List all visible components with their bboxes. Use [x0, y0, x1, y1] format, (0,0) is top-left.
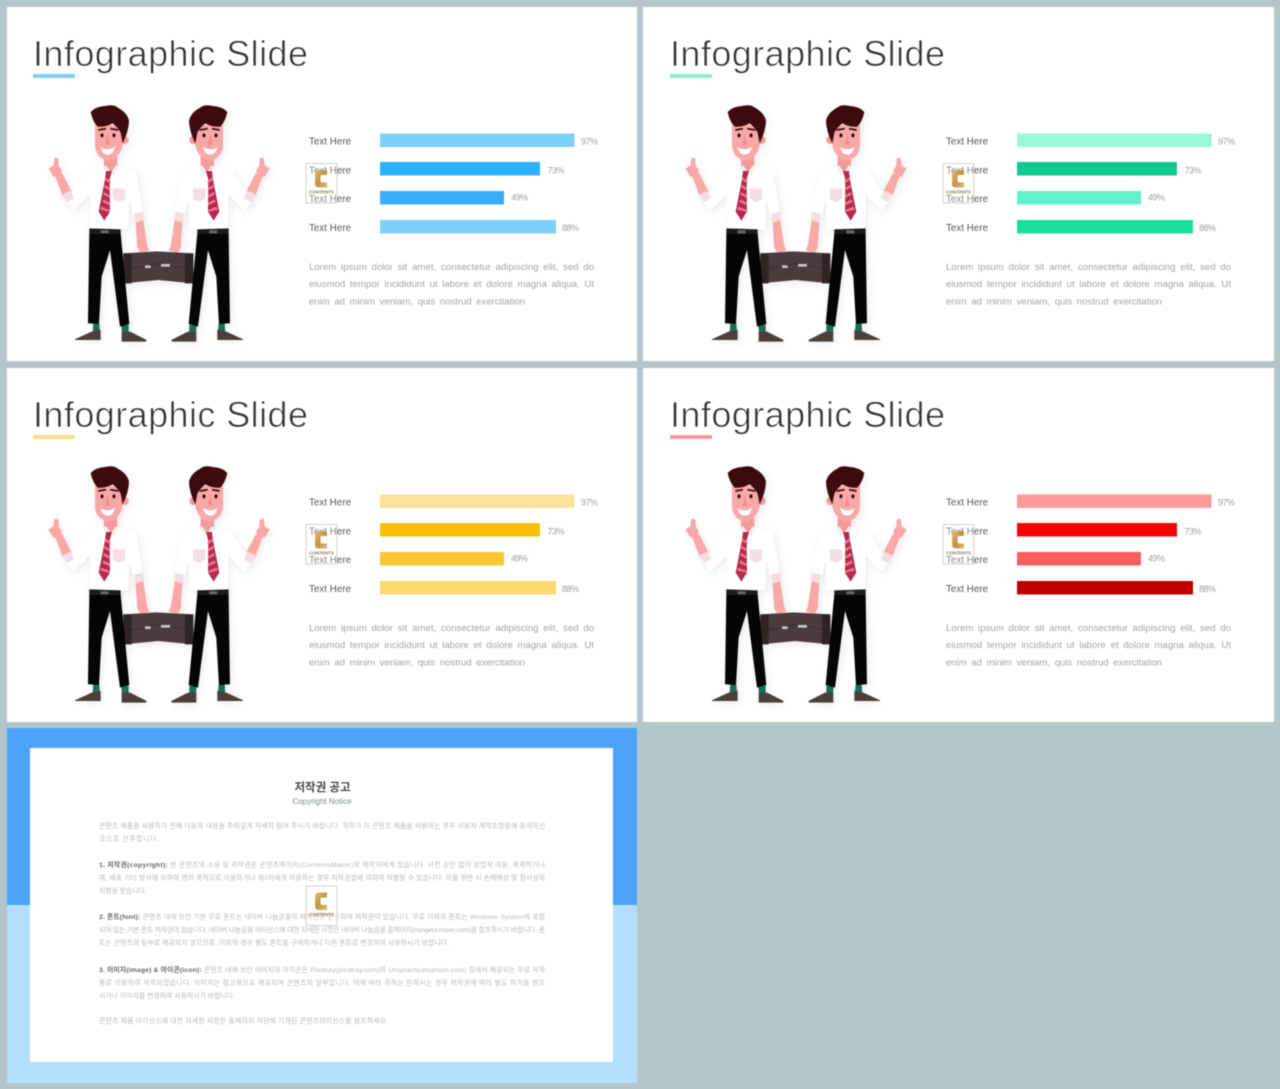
bar chart: Text Here — [309, 136, 351, 148]
bar chart: Text Here — [309, 498, 351, 508]
panel: blue infographic slide — [7, 7, 637, 361]
watermark logo: CONTENTS — [946, 550, 971, 556]
title: Infographic Slide — [33, 394, 308, 435]
bar chart: 97% — [1218, 497, 1235, 507]
panel: green infographic slide — [643, 7, 1274, 361]
bar chart — [309, 134, 598, 234]
title underline — [33, 74, 75, 78]
bar chart: 49% — [1148, 193, 1165, 203]
bar chart — [946, 134, 1235, 234]
title underline — [670, 435, 712, 439]
title: Infographic Slide — [670, 394, 945, 435]
bar chart: 88% — [1199, 223, 1216, 233]
body text — [309, 623, 594, 668]
title underline — [670, 74, 712, 78]
notice body text: 것으로 간주합니다. — [99, 834, 159, 843]
watermark logo: CONTENTS — [309, 190, 334, 194]
notice body text: 재, 배포 기타 방식에 의하여 영리 목적으로 이용하거나 제3자에게 이용하는 경우 저작권법에 의하여 처벌될 수 있습니다. 이를 위반 시 손해배상 및 형사상의 — [99, 873, 545, 882]
body text: Lorem ipsum dolor sit amet, consectetur adipiscing elit, sed do — [309, 623, 594, 634]
watermark logo — [306, 524, 337, 564]
notice heading: 저작권 공고 — [294, 780, 351, 794]
bar chart: Text Here — [309, 223, 351, 234]
body text: Lorem ipsum dolor sit amet, consectetur adipiscing elit, sed do — [946, 623, 1231, 634]
body text: Lorem ipsum dolor sit amet, consectetur adipiscing elit, sed do — [309, 262, 594, 273]
title: Infographic Slide — [670, 33, 945, 74]
title underline — [33, 435, 75, 439]
bar chart: 49% — [511, 193, 528, 203]
body text — [309, 262, 594, 308]
illustration: two businessmen carrying a briefcase — [48, 466, 270, 703]
bar chart: 73% — [1184, 526, 1202, 536]
bar chart: Text Here — [946, 194, 988, 205]
bar chart: Text Here — [946, 166, 988, 176]
bar chart: Text Here — [309, 555, 351, 566]
body text: eiusmod tempor incididunt ut labore et dolore magna aliqua. Ut — [946, 640, 1231, 651]
notice body text: 처벌을 받습니다. — [99, 886, 147, 895]
body text: enim ad minim veniam, quis nostrud exercitation — [946, 658, 1162, 668]
body text: eiusmod tempor incididunt ut labore et dolore magna aliqua. Ut — [309, 640, 594, 651]
body text — [946, 623, 1231, 668]
notice body text: 콘텐츠 제품 라이선스에 대한 자세한 사항은 홈페이지 하단에 기재된 콘텐츠라이선스를 참조하세요 — [99, 1016, 386, 1025]
watermark logo: CONTENTS — [309, 912, 334, 917]
watermark logo — [943, 524, 974, 564]
illustration: two businessmen carrying a briefcase — [685, 105, 907, 342]
bar chart: Text Here — [946, 223, 988, 234]
title: Infographic Slide — [33, 33, 308, 74]
notice body text: 물로 이용하여 저작되었습니다. 이미지는 참고용으로 제공되며 콘텐츠의 일부입니다. 이에 따라 귀하는 원하시는 경우 저작권에 따라 별도 허가를 받으 — [99, 978, 545, 987]
body text: Lorem ipsum dolor sit amet, consectetur adipiscing elit, sed do — [946, 262, 1231, 273]
bar chart: Text Here — [946, 136, 988, 148]
notice body text: 3. 이미지(image) & 아이콘(icon): 콘텐츠 내에 쓰인 이미지와 아이콘은 Pixabay(pixabay.com)와 Unsplash(unsplash.com) 등에서 제공되는 무료 저작 — [99, 965, 545, 974]
illustration: two businessmen carrying a briefcase — [685, 466, 907, 703]
bar chart: Text Here — [946, 584, 988, 595]
body text: enim ad minim veniam, quis nostrud exercitation — [946, 296, 1162, 308]
bar chart: Text Here — [946, 498, 988, 508]
body text: eiusmod tempor incididunt ut labore et dolore magna aliqua. Ut — [946, 279, 1231, 290]
bar chart — [946, 494, 1235, 595]
watermark logo: CONTENTS — [309, 550, 334, 556]
panel: yellow infographic slide — [7, 368, 637, 722]
notice body text — [99, 821, 546, 1025]
watermark logo — [943, 164, 974, 203]
bar chart: 73% — [548, 526, 564, 536]
bar chart: Text Here — [946, 526, 988, 538]
bar chart — [309, 494, 598, 595]
watermark logo — [306, 886, 337, 926]
bar chart: Text Here — [309, 584, 351, 595]
bar chart: 97% — [1218, 136, 1235, 146]
body text: eiusmod tempor incididunt ut labore et dolore magna aliqua. Ut — [309, 279, 594, 290]
notice body text: 트는 콘텐츠의 일부로 제공되지 않으므로, 이외의 경우 별도 폰트를 구매하거나 다른 폰트로 변경하여 사용하시기 바랍니다. — [99, 938, 449, 947]
bar chart: 88% — [1199, 584, 1216, 594]
notice body text: 시거나 이미지를 변경하여 사용하시기 바랍니다. — [99, 991, 235, 1000]
bar chart: Text Here — [309, 194, 351, 205]
illustration: two businessmen carrying a briefcase — [48, 105, 270, 342]
notice subheading: Copyright Notice — [292, 797, 352, 806]
bar chart: 73% — [1184, 165, 1202, 175]
bar chart: 88% — [562, 223, 579, 233]
bar chart: 49% — [511, 554, 528, 564]
bar chart: 97% — [581, 497, 598, 507]
notice body text: 1. 저작권(copyright): 본 콘텐츠의 소유 및 저작권은 콘텐츠메이커(ContentsMaker)와 제작자에게 있습니다. 사전 승인 없이 상업적 이용, 복제하거나 — [99, 860, 546, 869]
notice body text: 콘텐츠 제품을 사용하기 전에 다음의 내용을 주의깊게 자세히 읽어 주시기 바랍니다. 귀하가 이 콘텐츠 제품을 사용하는 경우 사용자 계약조항들에 동의하신 — [99, 821, 545, 830]
bar chart: Text Here — [309, 166, 351, 176]
body text: enim ad minim veniam, quis nostrud exercitation — [309, 658, 525, 668]
bar chart: 73% — [548, 165, 564, 175]
bar chart: 97% — [581, 136, 598, 146]
panel: copyright notice slide — [7, 728, 637, 1083]
bar chart: 88% — [562, 584, 579, 594]
bar chart: 49% — [1148, 554, 1165, 564]
watermark logo: CONTENTS — [946, 190, 971, 194]
panel: red infographic slide — [643, 368, 1274, 722]
notice body text: 2. 폰트(font): 콘텐츠 내에 쓰인 기본 무료 폰트는 네이버 나눔글꼴의 저작권을 준수하며 저작권이 있습니다. 무료 이외의 폰트는 Windows System에 포함 — [99, 912, 545, 921]
bar chart: Text Here — [309, 526, 351, 538]
watermark logo — [306, 164, 337, 203]
notice card — [30, 748, 613, 1062]
bar chart: Text Here — [946, 555, 988, 566]
notice body text: 되어 있는 기본 폰트 저작권이 있습니다. 네이버 나눔글꼴 라이선스에 대한 자세한 사항은 네이버 나눔글꼴 홈페이지(hangeul.naver.com)를 참조하시기 바랍니다. 폰 — [99, 925, 545, 934]
body text: enim ad minim veniam, quis nostrud exercitation — [309, 296, 525, 308]
body text — [946, 262, 1231, 308]
